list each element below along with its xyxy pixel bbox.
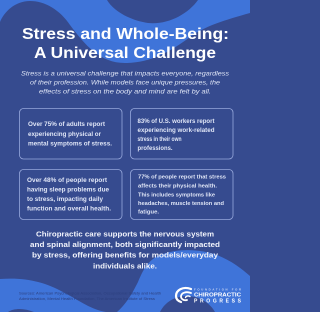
panel: workers stat: stress in their own xyxy=(138,137,182,143)
panel: adults stat xyxy=(20,108,122,159)
chiropractic statement xyxy=(30,230,220,270)
panel: workers stat: 83% of U.S. workers report xyxy=(138,119,214,125)
panel: physical health stat: fatigue. xyxy=(138,210,159,216)
panel: physical health stat: 77% of people report that stress xyxy=(138,175,226,181)
infographic xyxy=(0,0,250,312)
panel: adults stat: mental symptoms of stress. xyxy=(28,142,112,148)
bottom-left dark dome xyxy=(8,309,34,312)
chiropractic statement: Chiropractic care supports the nervous system xyxy=(36,230,215,239)
panel: sleep stat: to stress, impacting daily xyxy=(27,197,104,203)
panel: workers stat: professions. xyxy=(138,146,173,152)
chiropractic statement: by stress, offering benefits for models/everyday xyxy=(32,251,219,260)
logo wordmark xyxy=(194,288,242,304)
bottom-right dark dome xyxy=(160,296,215,312)
panel: sleep stat: function and overall health. xyxy=(27,207,111,213)
sources: Sources: American Psychological Association, Occupational Safety and Health xyxy=(19,292,161,296)
panel: workers stat: experiencing work-related xyxy=(138,128,215,134)
panel: workers stat xyxy=(130,108,233,159)
panel: physical health stat: affects their physical health. xyxy=(138,184,217,190)
intro text: effects of stress on the body and mind are felt by all. xyxy=(39,88,211,96)
title: A Universal Challenge xyxy=(34,45,216,62)
panel: physical health stat: headaches, muscle tension and xyxy=(138,201,224,207)
top wave: light blue xyxy=(0,0,250,63)
panel: adults stat: Over 75% of adults report xyxy=(28,122,105,128)
chiropractic statement: and spinal alignment, both significantly impacted xyxy=(30,240,220,249)
title xyxy=(22,26,229,62)
logo wordmark: PROGRESS xyxy=(194,298,242,304)
intro text: Stress is a universal challenge that impacts everyone, regardless xyxy=(21,70,229,78)
logo wordmark: FOUNDATION FOR xyxy=(194,288,241,292)
panel: sleep stat: Over 48% of people report xyxy=(27,178,107,184)
panel: physical health stat: This includes symptoms like xyxy=(138,192,216,198)
logo wordmark: CHIROPRACTIC xyxy=(194,292,241,298)
panel: physical health stat xyxy=(130,170,233,220)
sources xyxy=(19,292,161,301)
intro text xyxy=(21,70,229,96)
icon: swirl xyxy=(176,288,191,302)
sources: Administration, Mental Health Foundation, The American Institute of Stress xyxy=(19,297,155,301)
bottom wave: light blue xyxy=(0,250,250,312)
panel: sleep stat xyxy=(20,170,122,220)
chiropractic statement: individuals alike. xyxy=(93,261,157,270)
title: Stress and Whole-Being: xyxy=(22,26,229,43)
panel: adults stat: experiencing physical or xyxy=(28,132,102,138)
panel: sleep stat: having sleep problems due xyxy=(27,188,110,194)
intro text: of their profession. While models face unique pressures, the xyxy=(30,80,221,86)
logo: Foundation for Chiropractic Progress xyxy=(176,288,242,304)
top wave: dark blob xyxy=(107,0,198,23)
